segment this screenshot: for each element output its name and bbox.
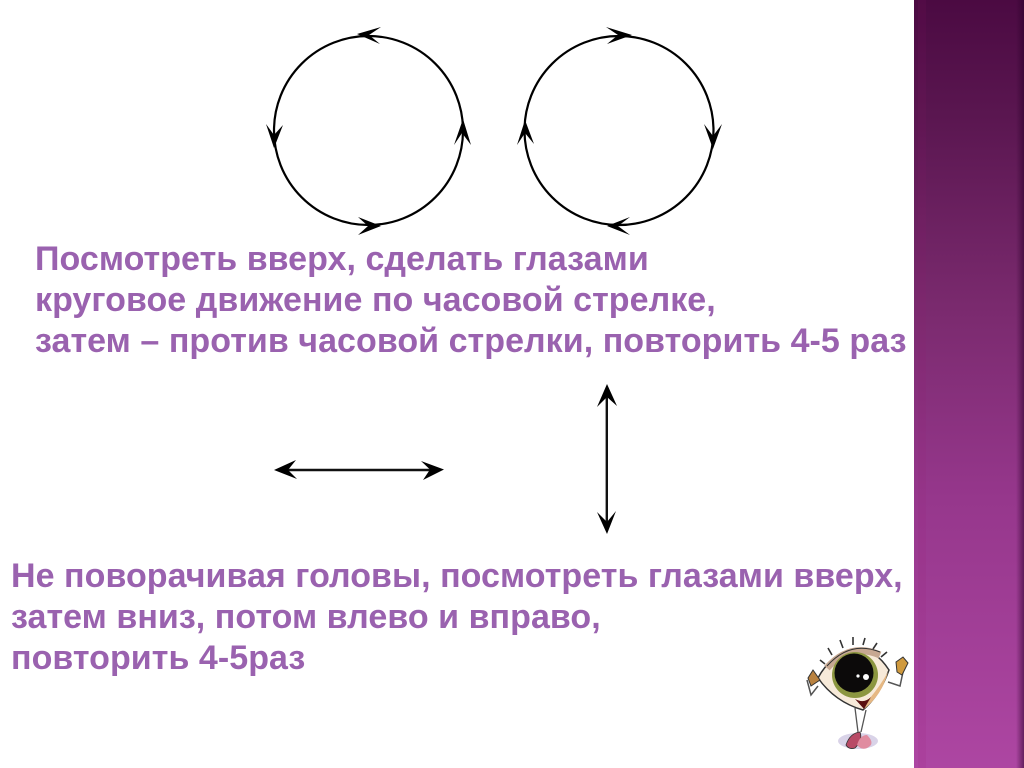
text block: circular movement instructions: Посмотреть вверх, сделать глазами [35,240,649,278]
panel: purple side band [914,0,1024,768]
vertical double arrow [597,384,617,534]
text block: circular movement instructions: затем – против часовой стрелки, повторить 4-5 раз [35,322,907,360]
text block: up down left right instructions: повторить 4-5раз [11,639,305,677]
horizontal double arrow [274,460,444,480]
left circle with arrows [266,27,471,235]
text block: up down left right instructions [11,557,903,677]
text block: circular movement instructions: круговое движение по часовой стрелке, [35,281,716,319]
right circle with arrows [517,27,722,235]
text block: up down left right instructions: Не поворачивая головы, посмотреть глазами вверх, [11,557,903,595]
text block: up down left right instructions: затем вниз, потом влево и вправо, [11,598,601,636]
text block: circular movement instructions [35,240,907,360]
